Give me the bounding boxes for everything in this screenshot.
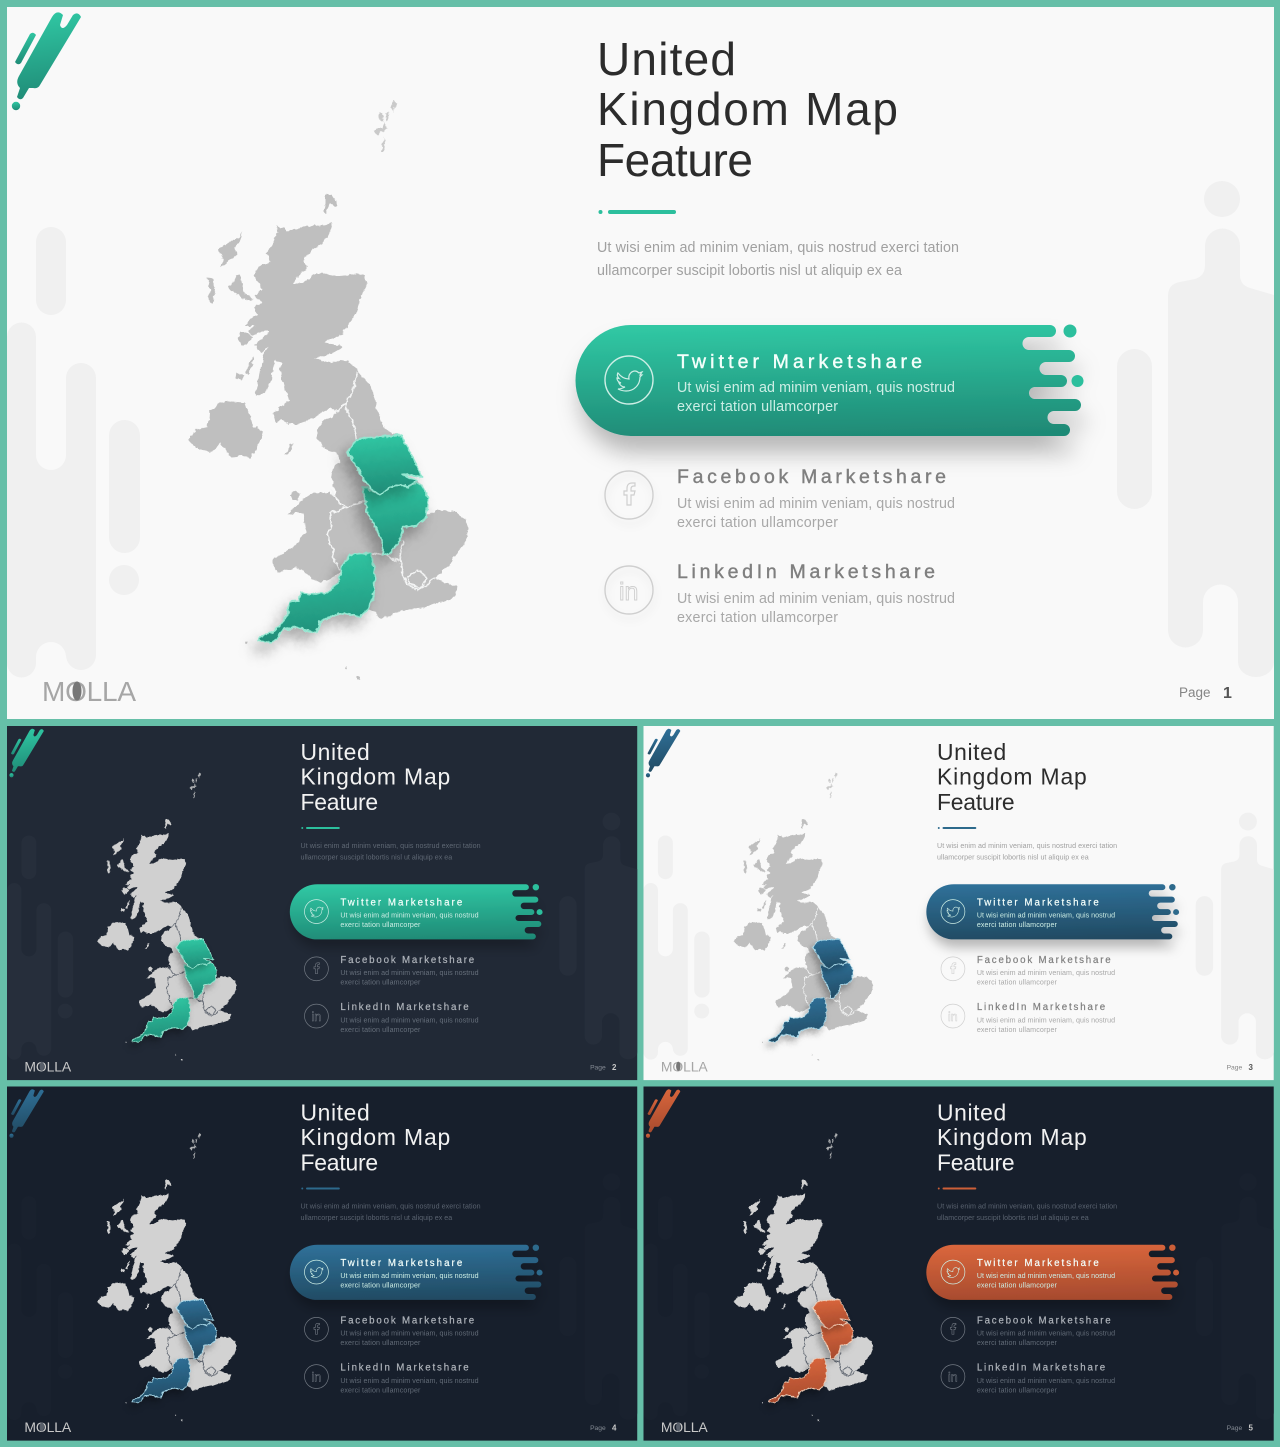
description [937, 842, 1117, 861]
item: LinkedIn Marketshare: LinkedIn Marketshare [977, 1002, 1105, 1013]
title: Feature [597, 134, 753, 186]
description: ullamcorper suscipit lobortis nisl ut aliquip ex ea [301, 853, 452, 861]
map of the United Kingdom [734, 1133, 873, 1421]
item: Facebook Marketshare: Ut wisi enim ad minim veniam, quis nostrud [340, 1330, 479, 1338]
text: Twitter: Twitter Marketshare [340, 1258, 462, 1269]
text: Twitter: Twitter Marketshare [340, 898, 462, 909]
item: Facebook Marketshare: Ut wisi enim ad minim veniam, quis nostrud [677, 496, 955, 512]
page number: 1 [1223, 685, 1232, 702]
active pill: Twitter Marketshare [576, 324, 1084, 436]
title [937, 1099, 1087, 1176]
text: Twitter: Twitter Marketshare [977, 1258, 1099, 1269]
text: Twitter: Ut wisi enim ad minim veniam, quis nostrud [977, 1272, 1115, 1280]
description [301, 842, 481, 861]
item: LinkedIn Marketshare: exerci tation ullamcorper [340, 1386, 421, 1394]
panel: slide 1 light teal [7, 7, 1274, 719]
title: United [937, 1099, 1006, 1125]
item: LinkedIn Marketshare: LinkedIn Marketshare [340, 1363, 469, 1374]
title divider [301, 1187, 340, 1189]
icon: twitter [305, 1260, 328, 1284]
item: LinkedIn Marketshare [941, 1002, 1115, 1034]
text: Twitter: exerci tation ullamcorper [977, 1281, 1058, 1289]
description [937, 1202, 1117, 1222]
item: Facebook Marketshare: exerci tation ullamcorper [977, 979, 1058, 987]
item: LinkedIn Marketshare: exerci tation ullamcorper [340, 1026, 421, 1034]
icon: twitter [941, 1260, 965, 1284]
title [302, 743, 450, 810]
icon: brand streak logo [12, 12, 81, 110]
item: Facebook Marketshare [305, 1315, 479, 1347]
description: ullamcorper suscipit lobortis nisl ut aliquip ex ea [597, 263, 902, 279]
item: LinkedIn Marketshare: LinkedIn Marketshare [340, 1002, 469, 1013]
icon: twitter [941, 900, 965, 924]
item: LinkedIn Marketshare [305, 1363, 479, 1394]
item: LinkedIn Marketshare: Ut wisi enim ad minim veniam, quis nostrud [677, 591, 955, 607]
highlighted regions [132, 1299, 216, 1403]
item: Facebook Marketshare: exerci tation ullamcorper [977, 1339, 1058, 1347]
description [301, 1202, 481, 1222]
description [597, 240, 959, 279]
item: LinkedIn Marketshare: exerci tation ullamcorper [677, 610, 838, 626]
item: LinkedIn Marketshare: in [619, 578, 638, 606]
text: Twitter: Ut wisi enim ad minim veniam, quis nostrud [340, 912, 479, 920]
title: United [301, 1099, 370, 1125]
panel: slide 3 light blue [644, 726, 1274, 1080]
active pill: Twitter Marketshare [290, 1244, 543, 1300]
page number [590, 1423, 617, 1432]
item: Facebook Marketshare: Facebook Marketshare [977, 955, 1111, 966]
item: LinkedIn Marketshare: Ut wisi enim ad minim veniam, quis nostrud [340, 1017, 479, 1025]
item: LinkedIn Marketshare: Ut wisi enim ad minim veniam, quis nostrud [977, 1017, 1115, 1025]
title: Kingdom Map [937, 764, 1087, 790]
highlighted regions [768, 1299, 853, 1403]
item: Facebook Marketshare: Facebook Marketshare [340, 1315, 474, 1326]
item: Facebook Marketshare: exerci tation ullamcorper [340, 979, 421, 987]
page number [1227, 1423, 1253, 1432]
logo: MOLLA [44, 682, 136, 702]
title divider [938, 1187, 976, 1189]
title: Kingdom Map [301, 1124, 450, 1150]
title divider [938, 827, 976, 829]
title: Feature [937, 1150, 1015, 1176]
active pill: Twitter Marketshare [290, 884, 543, 939]
map of the United Kingdom [188, 100, 468, 680]
logo: MOLLA: MOLLA [42, 676, 136, 707]
text: Twitter: exerci tation ullamcorper [977, 921, 1058, 929]
title divider [598, 210, 676, 214]
text: Twitter [977, 1258, 1115, 1289]
icon: brand streak logo [9, 1089, 44, 1138]
decorative background shapes [7, 181, 1274, 677]
map of the United Kingdom [734, 772, 873, 1061]
page number: 4 [612, 1423, 617, 1432]
text: Twitter: Ut wisi enim ad minim veniam, quis nostrud [340, 1272, 479, 1280]
item: LinkedIn Marketshare [605, 561, 955, 626]
item: Facebook Marketshare: Ut wisi enim ad minim veniam, quis nostrud [340, 969, 479, 977]
text: Twitter: exerci tation ullamcorper [677, 399, 838, 415]
item: LinkedIn Marketshare: Ut wisi enim ad minim veniam, quis nostrud [340, 1377, 479, 1385]
decorative background shapes [644, 1173, 1274, 1420]
highlighted regions [258, 435, 428, 643]
item: Facebook Marketshare: exerci tation ullamcorper [677, 515, 838, 531]
item: LinkedIn Marketshare: in [311, 1371, 321, 1385]
item: Facebook Marketshare: Ut wisi enim ad minim veniam, quis nostrud [977, 1330, 1115, 1338]
logo: MOLLA [26, 1062, 72, 1072]
item: Facebook Marketshare: Facebook Marketshare [677, 466, 946, 488]
item: LinkedIn Marketshare [305, 1002, 479, 1034]
title: United [597, 33, 736, 85]
description: Ut wisi enim ad minim veniam, quis nostrud exerci tation [937, 1202, 1117, 1210]
logo: MOLLA: MOLLA [661, 1419, 708, 1435]
item: LinkedIn Marketshare: exerci tation ullamcorper [977, 1386, 1058, 1394]
text: Twitter: Ut wisi enim ad minim veniam, quis nostrud [677, 380, 955, 396]
item: Facebook Marketshare [941, 1315, 1115, 1347]
text: Twitter: Twitter Marketshare [977, 898, 1099, 909]
text: Twitter: Ut wisi enim ad minim veniam, quis nostrud [977, 912, 1115, 920]
icon: brand streak logo [646, 729, 680, 777]
page number: Page [590, 1425, 606, 1432]
decorative background shapes [644, 813, 1274, 1060]
title: United [301, 739, 370, 765]
page number [590, 1064, 616, 1071]
item: Facebook Marketshare: Facebook Marketshare [340, 955, 474, 966]
item: Facebook Marketshare [941, 955, 1115, 987]
active pill: Twitter Marketshare [926, 1244, 1179, 1300]
description: ullamcorper suscipit lobortis nisl ut aliquip ex ea [937, 1214, 1089, 1222]
item: Facebook Marketshare [605, 466, 955, 531]
page number: 2 [612, 1063, 617, 1072]
description: Ut wisi enim ad minim veniam, quis nostrud exerci tation [937, 842, 1117, 850]
item: LinkedIn Marketshare: LinkedIn Marketshare [677, 561, 935, 583]
map of the United Kingdom [97, 1133, 236, 1421]
page number: Page [1227, 1064, 1242, 1071]
title: Kingdom Map [301, 764, 450, 790]
logo: MOLLA: MOLLA [661, 1058, 708, 1074]
panel: slide 2 dark teal [7, 726, 637, 1080]
logo: MOLLA: MOLLA [24, 1419, 72, 1435]
text: Twitter [340, 898, 479, 929]
page number: Page [1179, 685, 1211, 700]
description: ullamcorper suscipit lobortis nisl ut aliquip ex ea [301, 1214, 452, 1222]
item: LinkedIn Marketshare: in [948, 1010, 958, 1024]
title [301, 1099, 450, 1176]
description: Ut wisi enim ad minim veniam, quis nostrud exerci tation [301, 842, 481, 850]
decorative background shapes [637, 869, 638, 1054]
text: Twitter: exerci tation ullamcorper [340, 1281, 421, 1289]
item: Facebook Marketshare [305, 955, 479, 987]
icon: brand streak logo [646, 1089, 680, 1138]
map of the United Kingdom [97, 772, 236, 1061]
title: Kingdom Map [597, 83, 898, 135]
highlighted regions [132, 939, 216, 1042]
active pill: Twitter Marketshare [926, 884, 1179, 939]
item: LinkedIn Marketshare: LinkedIn Marketshare [977, 1363, 1105, 1374]
decorative background shapes [7, 1173, 637, 1420]
item: LinkedIn Marketshare: in [948, 1371, 958, 1385]
title [938, 743, 1086, 810]
page number [1227, 1063, 1253, 1072]
icon: twitter [605, 356, 653, 404]
text: Twitter [977, 898, 1115, 929]
description: ullamcorper suscipit lobortis nisl ut aliquip ex ea [937, 853, 1089, 861]
title [600, 42, 896, 176]
description: Ut wisi enim ad minim veniam, quis nostrud exerci tation [597, 240, 959, 256]
item: LinkedIn Marketshare [941, 1363, 1115, 1394]
title: Feature [301, 1150, 378, 1176]
item: LinkedIn Marketshare: exerci tation ullamcorper [977, 1026, 1058, 1034]
panel: slide 5 dark orange [644, 1086, 1274, 1441]
text: Twitter [340, 1258, 479, 1289]
item: LinkedIn Marketshare: in [311, 1010, 321, 1024]
page number: Page [1227, 1425, 1242, 1432]
description: Ut wisi enim ad minim veniam, quis nostrud exerci tation [301, 1202, 481, 1210]
icon: brand streak logo [9, 729, 44, 777]
item: Facebook Marketshare: Facebook Marketshare [977, 1315, 1111, 1326]
text: Twitter [677, 351, 955, 415]
panel: slide 4 dark blue [7, 1086, 637, 1441]
text: Twitter: exerci tation ullamcorper [340, 921, 421, 929]
title: Feature [937, 789, 1015, 815]
title divider [301, 827, 340, 829]
item: LinkedIn Marketshare: Ut wisi enim ad minim veniam, quis nostrud [977, 1377, 1115, 1385]
page number: 5 [1248, 1423, 1253, 1432]
item: Facebook Marketshare: Ut wisi enim ad minim veniam, quis nostrud [977, 969, 1115, 977]
title: Feature [301, 789, 378, 815]
highlighted regions [768, 939, 853, 1042]
icon: twitter [305, 900, 328, 924]
page number [1180, 687, 1232, 700]
logo: MOLLA: MOLLA [24, 1058, 72, 1074]
page number: Page [590, 1064, 606, 1071]
page number: 3 [1248, 1063, 1253, 1072]
item: Facebook Marketshare: exerci tation ullamcorper [340, 1339, 421, 1347]
title: United [937, 739, 1006, 765]
title: Kingdom Map [937, 1124, 1087, 1150]
text: Twitter: Twitter Marketshare [677, 351, 922, 373]
